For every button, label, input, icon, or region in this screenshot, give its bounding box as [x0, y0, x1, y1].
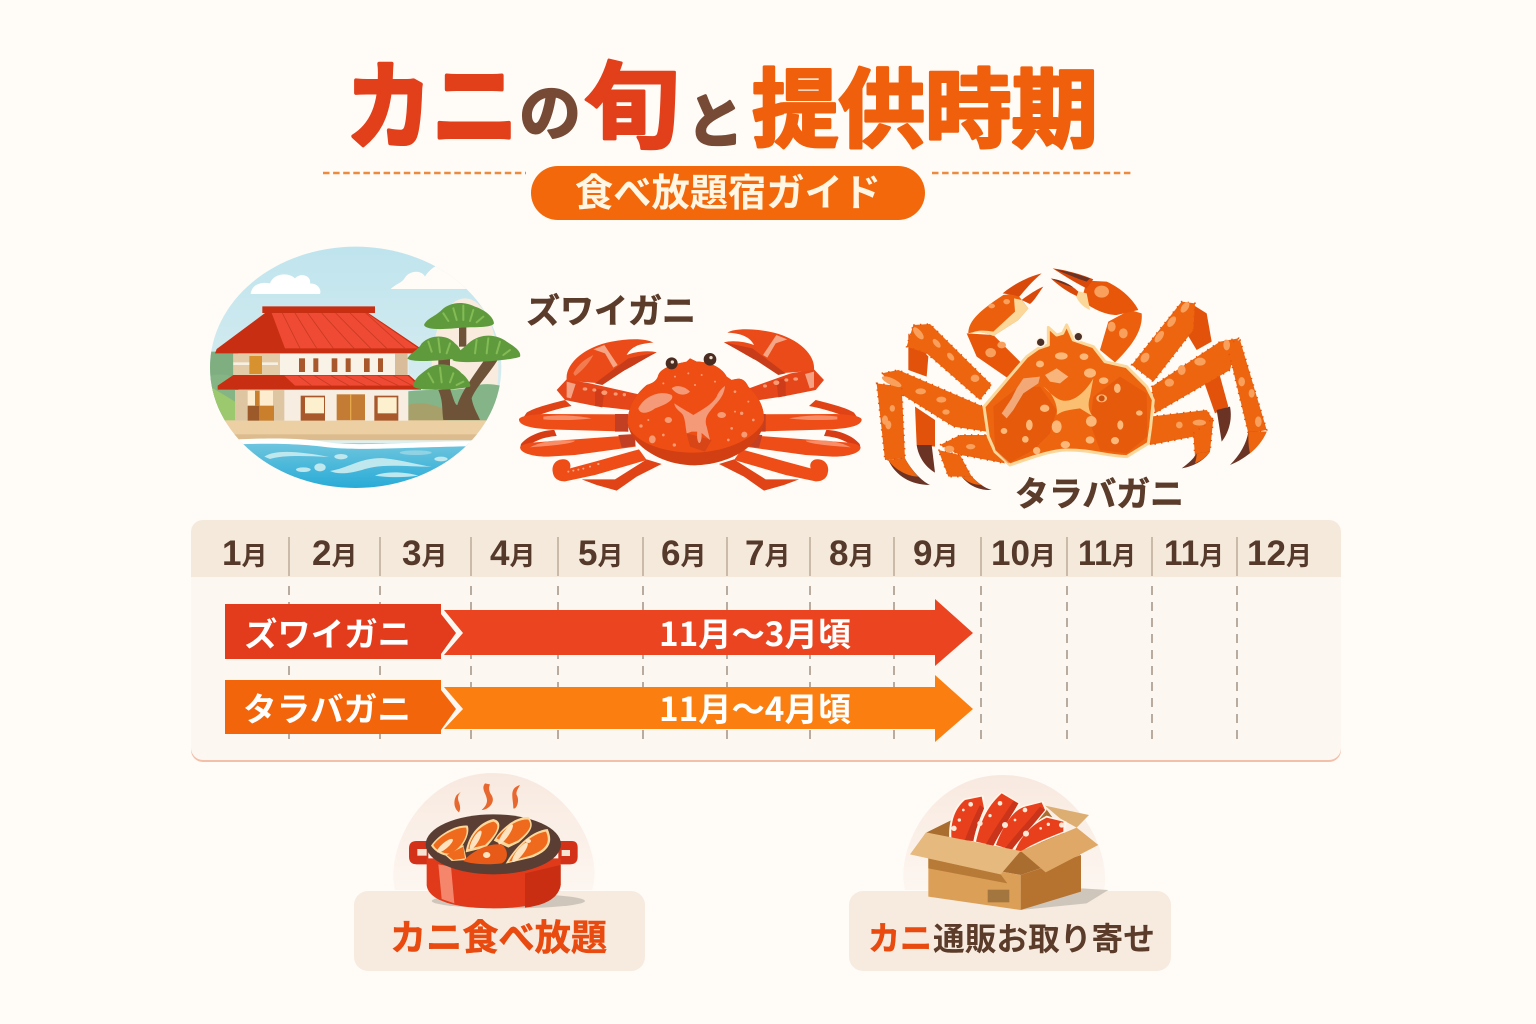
bar: king crab season: 11月〜4月頃	[659, 683, 851, 731]
upper roof	[215, 306, 422, 353]
calendar panel	[191, 520, 1341, 762]
carapace	[628, 358, 764, 465]
claws	[967, 333, 1023, 377]
right claw	[724, 329, 824, 401]
label: snow crab: ズワイガニ	[526, 284, 696, 333]
card: mail order	[849, 775, 1171, 971]
month header: 8月	[829, 534, 874, 573]
lower roof	[218, 375, 421, 390]
title: カニ	[346, 30, 518, 169]
carapace	[984, 325, 1153, 465]
cloud: left	[251, 274, 320, 294]
month header: 11月	[1078, 534, 1136, 573]
subtitle pill: 食べ放題宿ガイド	[575, 162, 881, 217]
month header: 3月	[402, 534, 447, 573]
month header: 11月	[1164, 534, 1224, 573]
eyes	[666, 357, 678, 369]
house	[215, 306, 422, 421]
title: と	[687, 75, 743, 159]
month header: 7月	[745, 534, 790, 573]
label: king crab: タラバガニ	[1015, 467, 1184, 516]
month header: 9月	[913, 534, 958, 573]
bar: snow crab season	[225, 599, 973, 666]
illustration: snow crab	[519, 329, 862, 491]
title	[346, 30, 1098, 169]
month header: 2月	[312, 534, 357, 573]
month header	[191, 520, 1341, 577]
month header: 5月	[578, 534, 623, 573]
subtitle pill	[323, 162, 1132, 220]
label: mail order: 通販お取り寄せ	[933, 914, 1155, 960]
month header: 1月	[222, 534, 267, 573]
back legs	[908, 305, 1228, 447]
card: crab all-you-can-eat	[354, 773, 645, 971]
title: 旬	[584, 32, 679, 168]
bar: king crab season: タラバガニ	[243, 683, 411, 731]
label: mail order: カニ	[868, 912, 932, 960]
bar: snow crab season: ズワイガニ	[244, 608, 411, 656]
eyes	[1036, 337, 1046, 347]
right legs	[719, 400, 862, 491]
label: crab buffet: カニ食べ放題	[390, 909, 607, 961]
title: 提供時期	[752, 40, 1098, 165]
bar: king crab season	[225, 675, 973, 742]
month header: 12月	[1247, 534, 1312, 573]
title: の	[519, 63, 581, 153]
month header: 4月	[490, 534, 535, 573]
month header: 10月	[991, 534, 1056, 573]
illustration: seaside inn	[205, 245, 525, 493]
pine tree	[407, 303, 520, 420]
month header: 6月	[661, 534, 706, 573]
bar: snow crab season: 11月〜3月頃	[659, 608, 851, 656]
icon: cardboard box	[910, 792, 1108, 910]
left claw	[557, 339, 657, 411]
left legs	[519, 400, 662, 491]
illustration: king crab	[877, 268, 1267, 490]
icon: hot pot	[409, 783, 585, 908]
